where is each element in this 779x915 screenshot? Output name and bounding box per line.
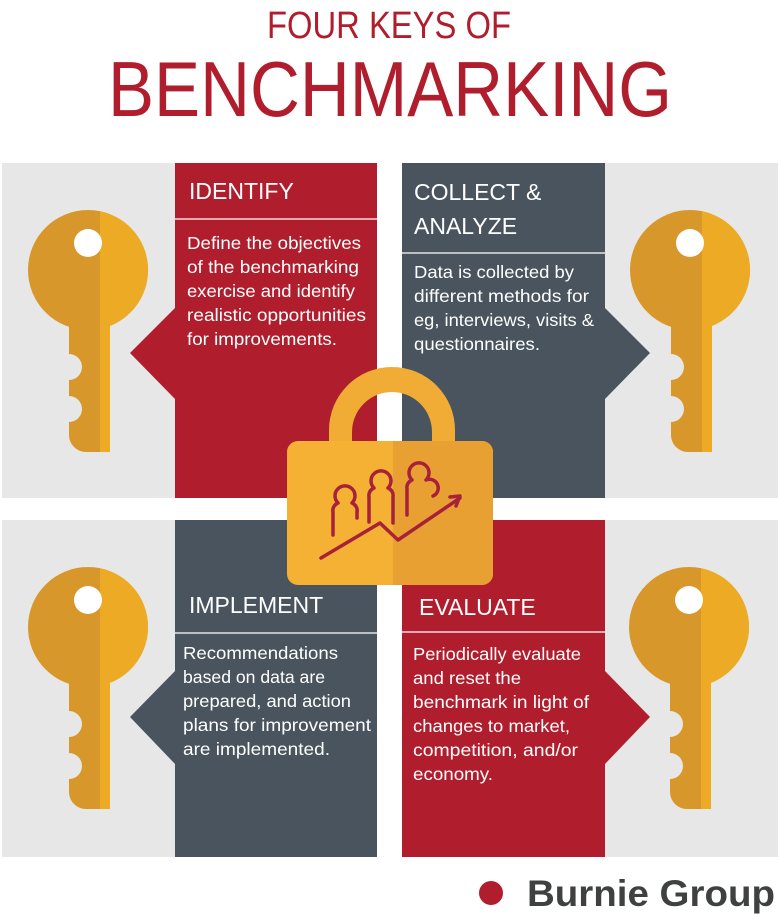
panel: identify: of the benchmarking — [187, 257, 359, 277]
panel: implement: Recommendations — [183, 643, 338, 663]
panel: identify: realistic opportunities — [187, 305, 366, 325]
icon: key — [630, 210, 750, 452]
panel: identify: IDENTIFY — [189, 178, 294, 204]
panel: collect & analyze: eg, interviews, visits & — [414, 310, 594, 330]
panel: implement: are implemented. — [183, 739, 330, 759]
panel: implement: plans for improvement — [183, 715, 371, 735]
panel: collect & analyze: COLLECT & — [414, 179, 541, 205]
panel: evaluate: and reset the — [413, 668, 521, 688]
panel: collect & analyze: ANALYZE — [414, 213, 517, 239]
title: FOUR KEYS OF — [267, 5, 511, 47]
logo: Burnie Group: Burnie Group — [527, 873, 775, 914]
panel: collect & analyze — [402, 163, 778, 498]
panel: evaluate: benchmark in light of — [413, 692, 589, 712]
panel: identify: Define the objectives — [187, 233, 361, 253]
panel: evaluate: EVALUATE — [419, 594, 536, 620]
panel: collect & analyze: different methods for — [414, 286, 589, 306]
panel: identify: for improvements. — [187, 329, 337, 349]
icon: padlock — [287, 367, 493, 585]
panel: collect & analyze: questionnaires. — [414, 334, 540, 354]
icon: key — [629, 567, 749, 809]
panel: evaluate: changes to market, — [413, 716, 570, 736]
panel: evaluate: competition, and/or — [413, 740, 578, 760]
title: BENCHMARKING — [108, 45, 672, 133]
panel: evaluate: Periodically evaluate — [413, 644, 581, 664]
panel: evaluate: economy. — [413, 764, 493, 784]
title — [108, 5, 672, 133]
panel: collect & analyze: Data is collected by — [414, 262, 574, 282]
panel: evaluate — [402, 520, 778, 857]
panel: implement: IMPLEMENT — [189, 592, 323, 618]
panel: implement: based on data are — [183, 667, 325, 687]
panel: implement — [2, 520, 377, 857]
panel: identify — [2, 163, 377, 498]
icon: key — [28, 210, 148, 452]
panel: implement: prepared, and action — [183, 691, 351, 711]
icon: key — [28, 567, 148, 809]
panel: identify: exercise and identify — [187, 281, 355, 301]
